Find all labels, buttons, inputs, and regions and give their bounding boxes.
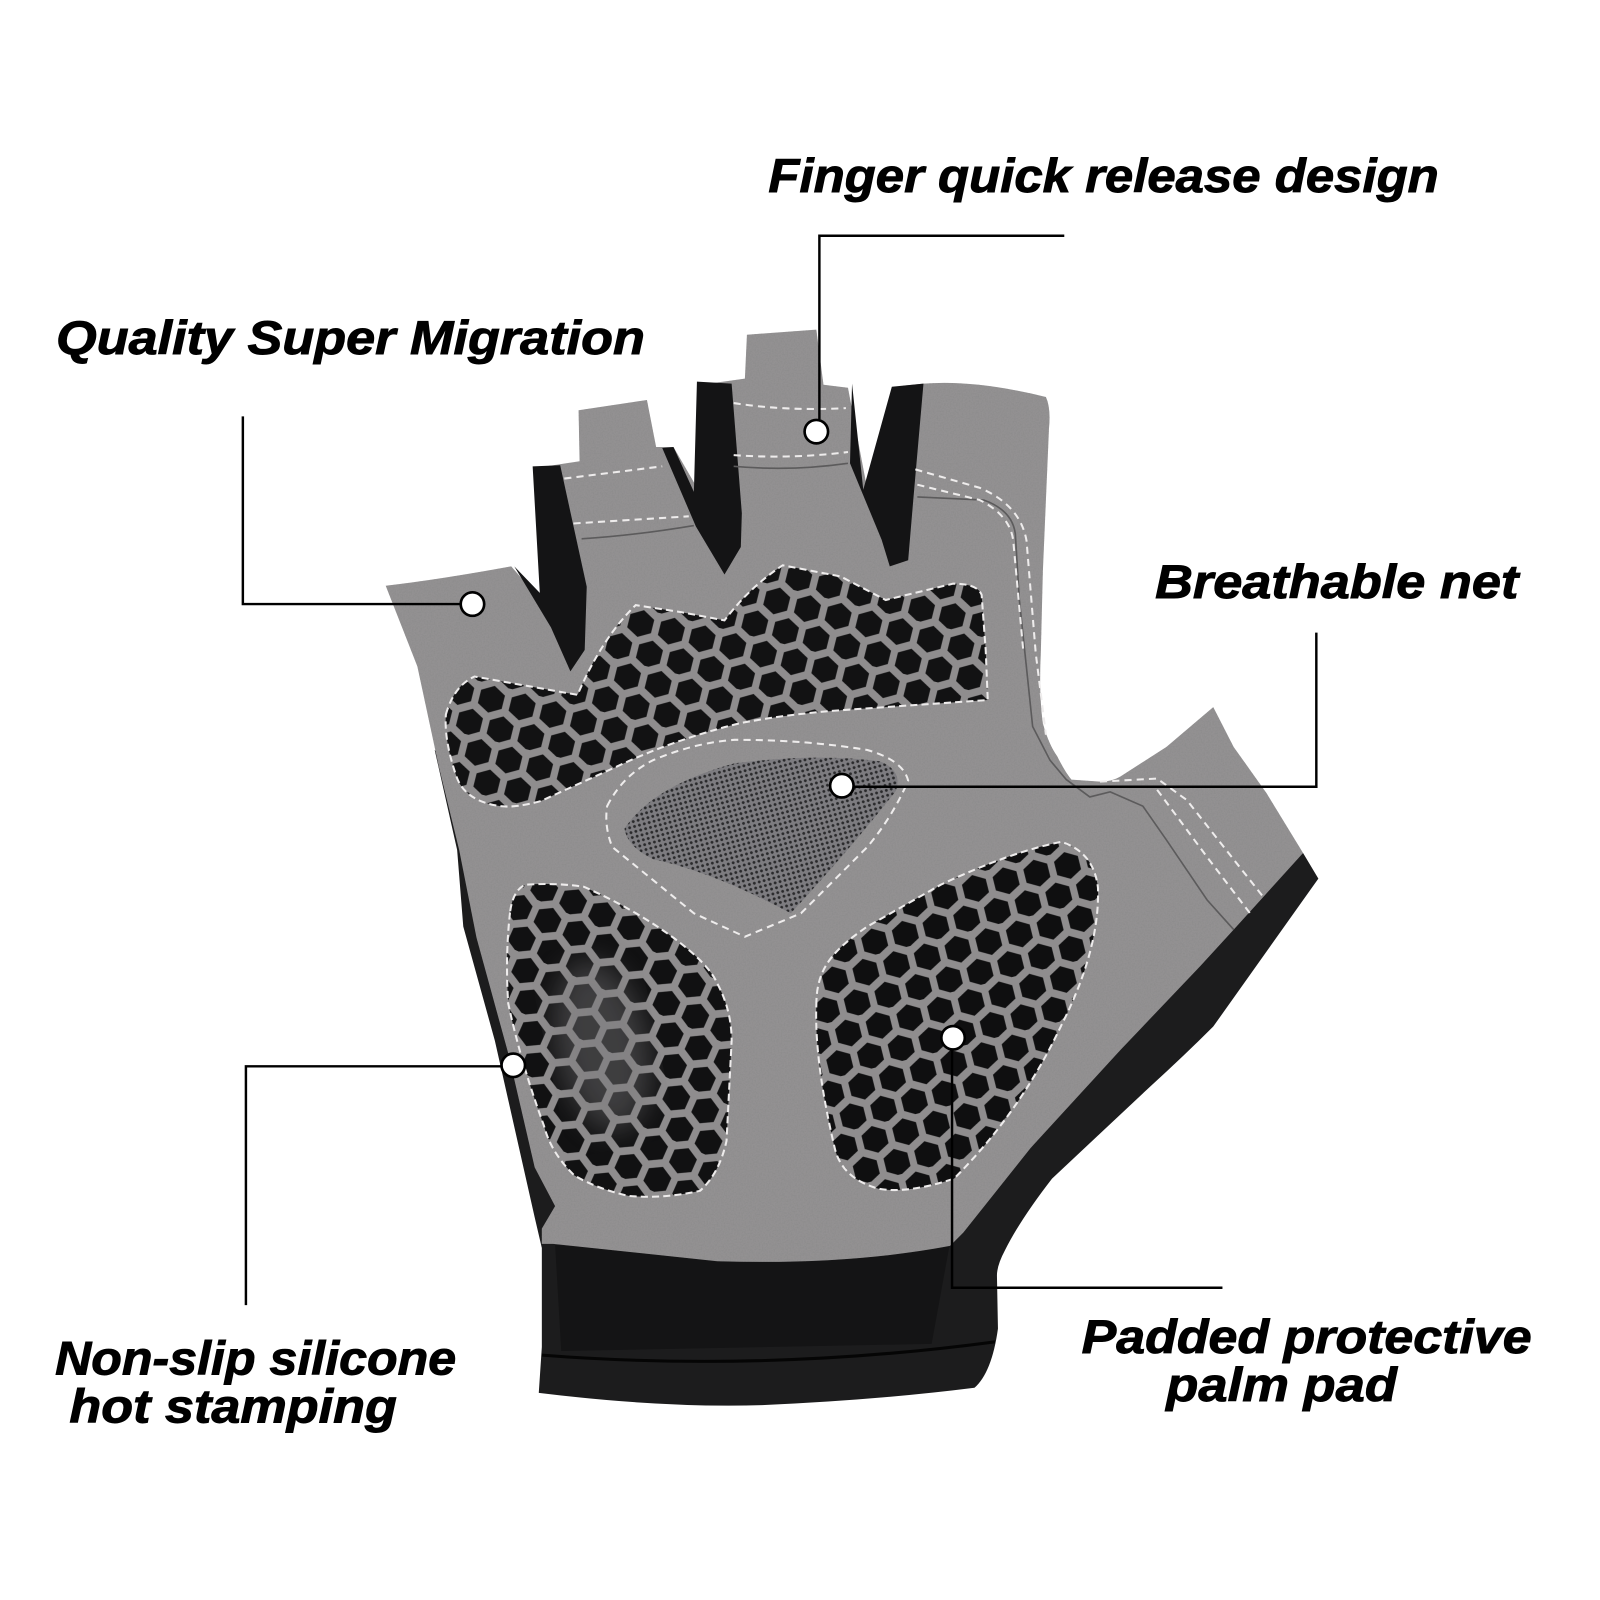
heading: breathable net: Breathable net: [1155, 556, 1521, 608]
upper palm silicone pad: [446, 565, 988, 807]
callout: finger quick release design: [768, 150, 1439, 443]
leader line: pinky: [243, 416, 460, 604]
heading line 1: non-slip silicone: Non-slip silicone: [55, 1332, 456, 1384]
heading line 2: hot stamping: hot stamping: [69, 1380, 397, 1432]
leader line: finger: [819, 236, 1064, 419]
heading line 2: palm pad: palm pad: [1164, 1359, 1398, 1411]
cuff hem seam: [542, 1342, 995, 1361]
marker dot: finger: [805, 420, 828, 443]
glove back fabric and cuff: [435, 750, 1318, 1406]
leader line: mesh: [854, 633, 1316, 787]
breathable mesh panel: [624, 758, 898, 913]
finger gusset: pinky to ring: [514, 465, 587, 671]
marker dot: mesh: [830, 774, 854, 797]
lower right silicone pad: [816, 842, 1098, 1190]
heading: finger quick release design: Finger quick release design: [768, 150, 1439, 202]
glove illustration: [386, 330, 1318, 1406]
heading line 1: padded protective: Padded protective: [1082, 1311, 1532, 1363]
leader line: silicone: [246, 1066, 501, 1305]
translucent area of lower left pad: [539, 952, 665, 1140]
heading: quality super migration: Quality Super Migration: [56, 312, 645, 364]
callout: breathable net: [830, 556, 1521, 797]
marker dot: pinky: [461, 592, 484, 616]
callout: non-slip silicone hot stamping: [55, 1054, 525, 1432]
callout: padded protective palm pad: [941, 1026, 1532, 1411]
marker dot: palm pad: [941, 1026, 965, 1049]
cuff inner panel: [555, 1243, 950, 1351]
callout: quality super migration: [56, 312, 645, 616]
suede palm: [386, 330, 1303, 1262]
mesh outer stitching: [606, 740, 908, 937]
finger gusset: ring to middle: [662, 382, 742, 574]
finger gusset: middle to index: [850, 384, 923, 566]
leader line: palm pad: [952, 1050, 1222, 1288]
lower left silicone pad: [507, 884, 732, 1197]
marker dot: silicone: [502, 1054, 525, 1077]
seam lines: [582, 463, 1234, 930]
stitching: [564, 403, 1263, 913]
